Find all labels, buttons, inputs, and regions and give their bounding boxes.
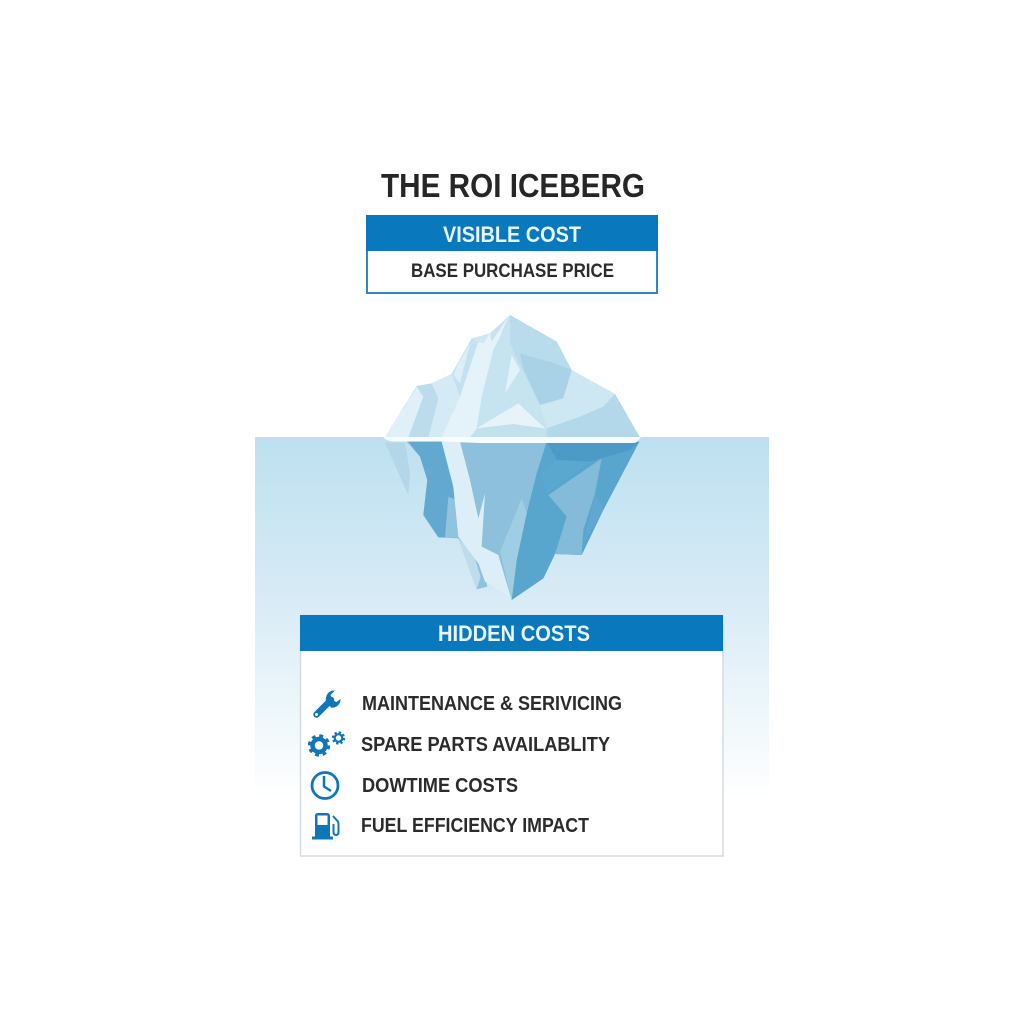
waterline highlight [383,437,641,443]
iceberg below water [385,442,639,600]
icon: fuel pump [312,813,338,840]
visible cost item: BASE PURCHASE PRICE [411,260,614,282]
panel: hidden costs [300,615,723,856]
list item: downtime: DOWTIME COSTS [362,775,518,797]
water background [255,437,769,800]
icon: wrench [315,690,341,716]
iceberg above water [385,315,640,437]
icon: gears [309,732,344,755]
visible cost heading: VISIBLE COST [443,222,582,247]
panel: visible cost [366,215,658,293]
list item: spare parts: SPARE PARTS AVAILABLITY [361,734,611,756]
icon: clock [312,772,338,798]
list item: fuel efficiency: FUEL EFFICIENCY IMPACT [361,815,589,837]
hidden costs heading: HIDDEN COSTS [438,621,590,646]
list item: maintenance: MAINTENANCE & SERIVICING [362,693,622,715]
title: THE ROI ICEBERG [381,167,645,204]
